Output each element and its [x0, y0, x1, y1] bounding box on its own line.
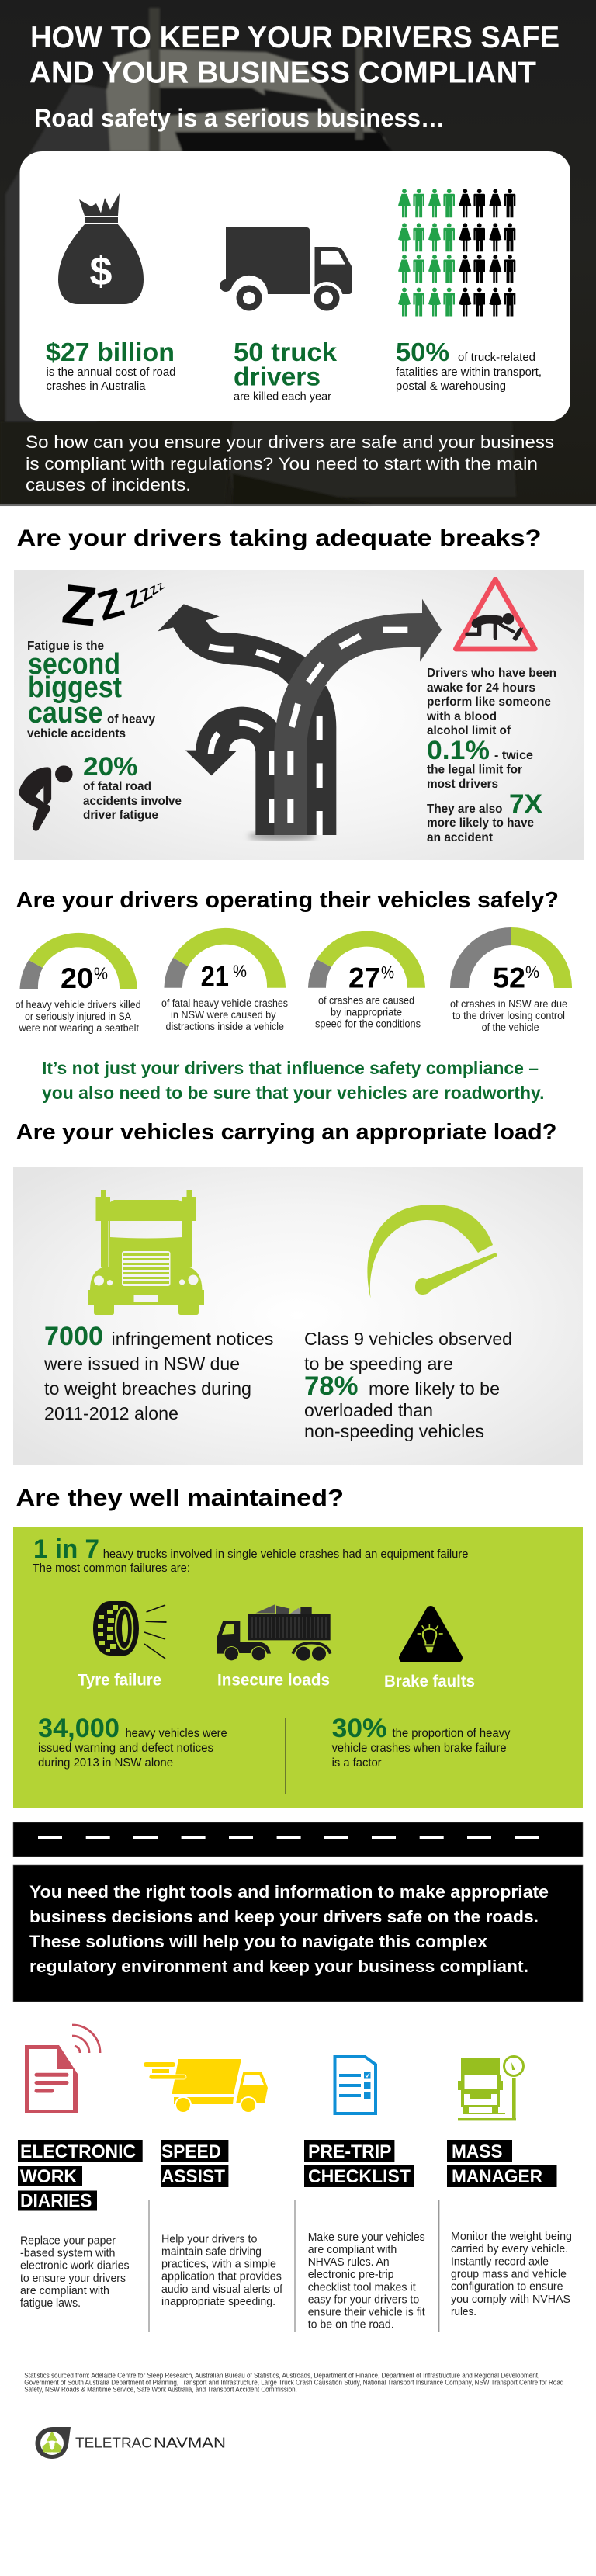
text: awake for 24 hours: They are also — [427, 803, 503, 816]
stat: 34,000 heavy vehicles: during 2013 in NSW alone — [38, 1756, 173, 1770]
stat: $27 billion: crashes in Australia — [47, 380, 146, 393]
stat: 34,000 heavy vehicles: issued warning and defect notices — [38, 1742, 213, 1755]
icon: warning sign with drunk driver — [456, 580, 535, 649]
icon: sleeping zzz: Z — [147, 583, 161, 598]
text: awake for 24 hours: Drivers who have been — [427, 667, 556, 680]
stat: 30% brake failure: is a factor — [332, 1756, 382, 1770]
title — [29, 21, 560, 90]
stat: 1 in 7: heavy trucks involved in single vehicle crashes had an equipment failure — [103, 1548, 468, 1561]
illustration: forking road arrows — [158, 599, 442, 840]
solution: mass manager: MANAGER — [452, 2166, 542, 2187]
panel: maintenance — [13, 1527, 583, 1808]
stat: 7000 infringement notices: 2011-2012 alone — [44, 1403, 178, 1423]
stat: 7000 infringement notices: infringement notices — [112, 1329, 273, 1349]
stat: 78% more likely overloaded: overloaded than — [304, 1400, 433, 1420]
stat: 1 in 7: 1 in 7 — [33, 1534, 99, 1564]
icon: sleeping zzz: Z — [92, 580, 129, 630]
icon: speedometer — [367, 1205, 497, 1298]
gauge chart: 27% inappropriate speed: of crashes are caused — [318, 995, 414, 1007]
solution: speed assist: ASSIST — [161, 2166, 225, 2187]
panel: right tools callout: regulatory environment and keep your business compliant. — [29, 1957, 528, 1976]
solution: electronic work diaries: fatigue laws. — [20, 2297, 81, 2310]
sources footnote: Statistics sourced from: Adelaide Centre for Sleep Research, Australian Bureau of Statistics, Austroads, Department of Finance, Department of Infrastructure and Regional Development, — [24, 2371, 539, 2379]
solution: pre-trip checklist: to be on the road. — [308, 2318, 394, 2332]
gauge chart: 20% seatbelt: or seriously injured in SA — [25, 1011, 131, 1022]
icon: warning triangle with bulb — [404, 1610, 458, 1658]
stat: 50 truck drivers: drivers — [234, 363, 321, 392]
stat: $27 billion: $27 billion — [46, 338, 175, 367]
solution: mass manager: Monitor the weight being — [451, 2230, 572, 2243]
stat: 7000 infringement notices: were issued in NSW due — [43, 1354, 240, 1374]
gauge chart: 21% distractions: distractions inside a vehicle — [166, 1021, 284, 1032]
stat: 50 truck drivers: 50 truck — [234, 338, 337, 367]
intro text: is compliant with regulations? You need to start with the main — [26, 454, 538, 473]
solution: electronic work diaries — [18, 2140, 143, 2310]
stat: 78% more likely overloaded: 78% — [304, 1371, 359, 1401]
text: awake for 24 hours: most drivers — [427, 778, 498, 791]
labels: failure types: Insecure loads — [217, 1671, 330, 1690]
icon: front view truck — [88, 1190, 204, 1315]
solution: pre-trip checklist: Make sure your vehicles — [308, 2231, 425, 2244]
solution: electronic work diaries: DIARIES — [20, 2190, 92, 2212]
stat: 50% of fatalities: of truck-related — [458, 351, 535, 364]
solution: mass manager — [447, 2140, 572, 2318]
solution: pre-trip checklist: PRE-TRIP — [308, 2141, 391, 2162]
solution: mass manager: carried by every vehicle. — [451, 2242, 568, 2255]
icon: sleeping zzz: Z — [123, 585, 147, 614]
stat: 20% fatal accidents: accidents involve — [83, 795, 182, 808]
stat: 1 in 7: The most common failures are: — [33, 1562, 190, 1575]
text: awake for 24 hours: - twice — [494, 749, 533, 762]
labels: failure types — [78, 1671, 475, 1690]
solution: electronic work diaries: -based system with — [20, 2247, 115, 2260]
gauge chart: 21% distractions — [161, 928, 288, 1032]
solution: pre-trip checklist: electronic pre-trip — [308, 2268, 394, 2281]
heading: appropriate load: Are your vehicles carrying an appropriate load? — [16, 1120, 557, 1145]
solution: pre-trip checklist: NHVAS rules. An — [308, 2255, 390, 2269]
text: awake for 24 hours: 0.1% — [427, 736, 490, 765]
solution: speed assist: application that provides — [161, 2270, 282, 2283]
gauge chart: 52% losing control: % — [525, 962, 539, 982]
solution: electronic work diaries: to ensure your drivers — [20, 2272, 126, 2285]
intro text: causes of incidents. — [26, 475, 191, 494]
stat: 20% fatal accidents: 20% — [83, 752, 138, 782]
sources footnote: Safety, NSW Roads & Maritime Service, Safe Work Australia, and Transport Accident Commission. — [24, 2386, 297, 2394]
green statement: It’s not just your drivers that influence safety compliance – — [42, 1058, 539, 1078]
stat: 30% brake failure: 30% — [332, 1714, 387, 1743]
heading: well maintained: Are they well maintained? — [16, 1484, 344, 1511]
road divider — [13, 1822, 583, 1857]
solution: speed assist: audio and visual alerts of — [161, 2283, 283, 2296]
icon: sleeping zzz: Z — [59, 573, 99, 639]
heading: operating safely: Are your drivers operating their vehicles safely? — [16, 888, 559, 913]
stat: 50% of fatalities — [396, 338, 542, 393]
text: awake for 24 hours: alcohol limit of — [427, 724, 511, 737]
stat: 20% fatal accidents: of fatal road — [83, 780, 151, 793]
panel: right tools callout: You need the right tools and information to make appropriate — [29, 1882, 549, 1902]
title: AND YOUR BUSINESS COMPLIANT — [29, 57, 536, 90]
gauge chart: 20% seatbelt: % — [94, 964, 108, 983]
gauge chart: 21% distractions: of fatal heavy vehicle crashes — [161, 997, 288, 1009]
icon: sleeping zzz: Z — [138, 584, 155, 605]
hero background — [0, 0, 596, 506]
stat: 30% brake failure: vehicle crashes when brake failure — [332, 1742, 507, 1755]
stat: 34,000 heavy vehicles — [38, 1714, 227, 1770]
text: fatigue second biggest cause: Fatigue is the — [27, 640, 104, 653]
solution: mass manager: MASS — [452, 2141, 503, 2162]
icon: sleeping zzz: Z — [155, 581, 166, 593]
stat: 20% fatal accidents: driver fatigue — [83, 809, 158, 822]
stat: 30% brake failure: the proportion of heavy — [393, 1727, 511, 1740]
stat: 78% more likely overloaded: non-speeding vehicles — [304, 1421, 484, 1441]
intro text: So how can you ensure your drivers are safe and your business — [26, 432, 554, 452]
pictogram: half of the people highlighted — [398, 189, 515, 317]
stat: 50% of fatalities: 50% — [396, 338, 449, 367]
solution: pre-trip checklist: CHECKLIST — [308, 2166, 411, 2187]
stat: 7000 infringement notices: 7000 — [44, 1322, 103, 1351]
text: awake for 24 hours: perform like someone — [427, 695, 551, 709]
text: awake for 24 hours: an accident — [427, 831, 494, 844]
icon: electronic work diary — [25, 2025, 100, 2113]
stat: 50 truck drivers — [234, 338, 337, 403]
gauge chart: 52% losing control: of crashes in NSW are due — [450, 998, 567, 1010]
sources footnote — [24, 2371, 563, 2394]
stat: $27 billion — [46, 338, 175, 393]
text: awake for 24 hours: awake for 24 hours — [427, 681, 535, 695]
solution: pre-trip checklist: checklist tool makes it — [308, 2280, 416, 2293]
text: fatigue second biggest cause: second — [28, 648, 120, 681]
icon: mass manager scale — [458, 2057, 523, 2120]
stat: 7000 infringement notices — [43, 1322, 273, 1423]
gauge chart: 27% inappropriate speed — [308, 931, 425, 1030]
icon: pre-trip checklist — [334, 2055, 377, 2115]
stat: 78% more likely overloaded: Class 9 vehicles observed — [304, 1329, 512, 1349]
solution: pre-trip checklist: ensure their vehicle is fit — [308, 2306, 425, 2319]
stat: 78% more likely overloaded: to be speeding are — [304, 1354, 453, 1374]
gauge chart: 21% distractions: in NSW were caused by — [171, 1009, 276, 1021]
gauge chart: 20% seatbelt: were not wearing a seatbelt — [19, 1022, 139, 1034]
panel: road safety statistics card — [20, 151, 570, 421]
text: fatigue second biggest cause — [27, 640, 155, 740]
intro text — [26, 432, 554, 494]
solution: speed assist: Help your drivers to — [161, 2232, 257, 2245]
stat: 7000 infringement notices: to weight breaches during — [44, 1378, 251, 1399]
text: awake for 24 hours — [426, 667, 556, 844]
icon: tyre — [93, 1601, 166, 1659]
solution: speed assist: inappropriate speeding. — [161, 2295, 275, 2308]
logo: Teletrac Navman — [36, 2427, 226, 2459]
gauge chart: 52% losing control: to the driver losing control — [452, 1010, 565, 1021]
text: fatigue second biggest cause: of heavy — [107, 712, 155, 726]
gauge chart: 27% inappropriate speed: speed for the conditions — [315, 1018, 421, 1030]
labels: failure types: Brake faults — [384, 1672, 475, 1690]
solution: electronic work diaries: electronic work diaries — [20, 2259, 130, 2273]
text: awake for 24 hours: more likely to have — [427, 816, 534, 830]
stat: 78% more likely overloaded: more likely to be — [369, 1378, 500, 1399]
solution: speed assist: maintain safe driving — [161, 2245, 262, 2259]
panel: load — [13, 1167, 583, 1465]
logo: Teletrac Navman: TELETRAC — [75, 2435, 152, 2450]
text: awake for 24 hours: with a blood — [426, 710, 497, 723]
gauge chart: 52% losing control: of the vehicle — [482, 1021, 539, 1033]
gauge chart: 20% seatbelt: of heavy vehicle drivers killed — [16, 999, 141, 1011]
solution: mass manager: configuration to ensure — [451, 2280, 563, 2293]
logo: Teletrac Navman: NAVMAN — [154, 2435, 226, 2450]
stat: 30% brake failure — [332, 1714, 511, 1770]
icon: speeding yellow truck — [144, 2059, 268, 2113]
solution: speed assist — [161, 2140, 283, 2308]
text: fatigue second biggest cause: vehicle accidents — [27, 727, 126, 740]
text: awake for 24 hours: 7X — [509, 789, 542, 819]
stat: 1 in 7 — [33, 1534, 468, 1575]
solution: electronic work diaries: ELECTRONIC — [20, 2141, 136, 2162]
gauge chart: 52% losing control: 52 — [493, 962, 525, 994]
icon: money bag: $ — [90, 249, 113, 294]
icon: sleeping zzz — [59, 573, 166, 639]
solution: electronic work diaries: WORK — [20, 2166, 78, 2187]
stat: 34,000 heavy vehicles: heavy vehicles were — [126, 1727, 227, 1740]
stat: 50 truck drivers: are killed each year — [234, 390, 331, 403]
solution: pre-trip checklist — [304, 2140, 425, 2332]
labels: failure types: Tyre failure — [78, 1671, 161, 1690]
gauge chart: 27% inappropriate speed: % — [381, 963, 394, 983]
panel: fatigue — [14, 570, 584, 860]
title: HOW TO KEEP YOUR DRIVERS SAFE — [30, 21, 560, 54]
subtitle: Road safety is a serious business… — [34, 103, 445, 132]
solution: mass manager: rules. — [451, 2305, 476, 2318]
panel: right tools callout — [13, 1865, 583, 2002]
icon: truck with insecure load — [217, 1604, 331, 1661]
gauge chart: 21% distractions: 21 — [201, 961, 229, 993]
icon: slumped tired person — [19, 765, 73, 831]
solution: pre-trip checklist: are compliant with — [308, 2243, 397, 2256]
stat: 34,000 heavy vehicles: 34,000 — [38, 1714, 120, 1743]
stat: 50% of fatalities: postal & warehousing — [396, 380, 506, 393]
gauge chart: 21% distractions: % — [233, 962, 247, 981]
solution: pre-trip checklist: easy for your drivers to — [308, 2293, 419, 2307]
stat: 78% more likely overloaded — [304, 1329, 512, 1441]
text: awake for 24 hours: the legal limit for — [427, 764, 522, 777]
solution: mass manager: Instantly record axle — [451, 2255, 549, 2268]
green statement: you also need to be sure that your vehicles are roadworthy. — [42, 1083, 545, 1103]
gauge chart: 20% seatbelt — [16, 933, 141, 1034]
heading: adequate breaks: Are your drivers taking adequate breaks? — [17, 525, 542, 551]
panel: right tools callout: These solutions will help you to navigate this complex — [29, 1932, 487, 1951]
panel: right tools callout: business decisions and keep your drivers safe on the roads. — [29, 1907, 539, 1926]
stat: 50% of fatalities: fatalities are within transport, — [396, 366, 542, 379]
solution: speed assist: practices, with a simple — [161, 2258, 276, 2271]
stat: $27 billion: is the annual cost of road — [47, 366, 175, 379]
gauge chart: 27% inappropriate speed: 27 — [348, 962, 380, 994]
green statement — [42, 1058, 545, 1103]
icon: money bag — [58, 193, 144, 304]
solution: speed assist: SPEED — [161, 2141, 221, 2162]
solution: electronic work diaries: are compliant with — [20, 2284, 109, 2297]
gauge chart: 52% losing control — [450, 927, 572, 1033]
text: fatigue second biggest cause: cause — [28, 697, 102, 730]
solution: electronic work diaries: Replace your paper — [20, 2234, 116, 2248]
stat: 20% fatal accidents — [83, 752, 182, 822]
solution: mass manager: group mass and vehicle — [451, 2268, 567, 2281]
text: fatigue second biggest cause: biggest — [28, 671, 122, 704]
gauge chart: 27% inappropriate speed: by inappropriate — [331, 1007, 402, 1018]
solution: mass manager: you comply with NVHAS — [451, 2293, 570, 2306]
icon: delivery truck — [220, 227, 352, 314]
gauge chart: 20% seatbelt: 20 — [61, 962, 93, 994]
